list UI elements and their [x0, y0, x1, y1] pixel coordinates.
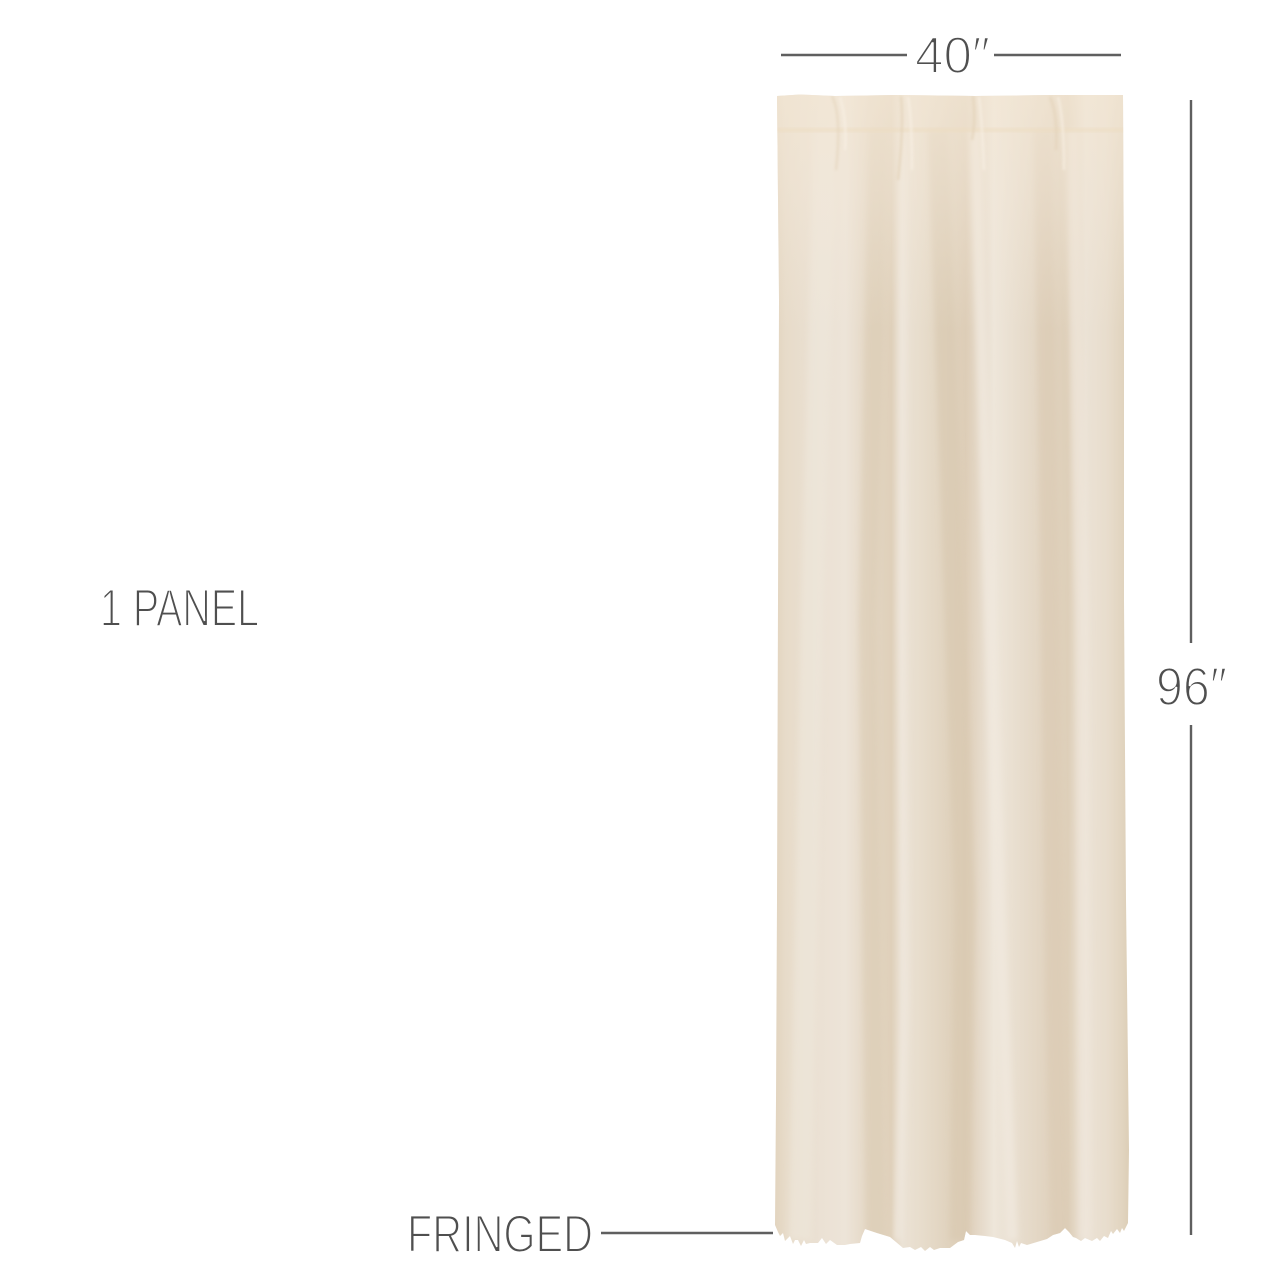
- header seam: [777, 128, 1124, 132]
- height dimension: 96 inches: 96″: [1156, 657, 1227, 717]
- callout: fringed hem: FRINGED: [407, 1205, 593, 1264]
- gathered pleats: [832, 96, 1064, 180]
- width dimension: 40 inches: 40″: [915, 27, 990, 85]
- fold shading: [800, 130, 1085, 1240]
- label: 1 panel: 1 PANEL: [100, 579, 259, 638]
- curtain panel: [770, 90, 1135, 1260]
